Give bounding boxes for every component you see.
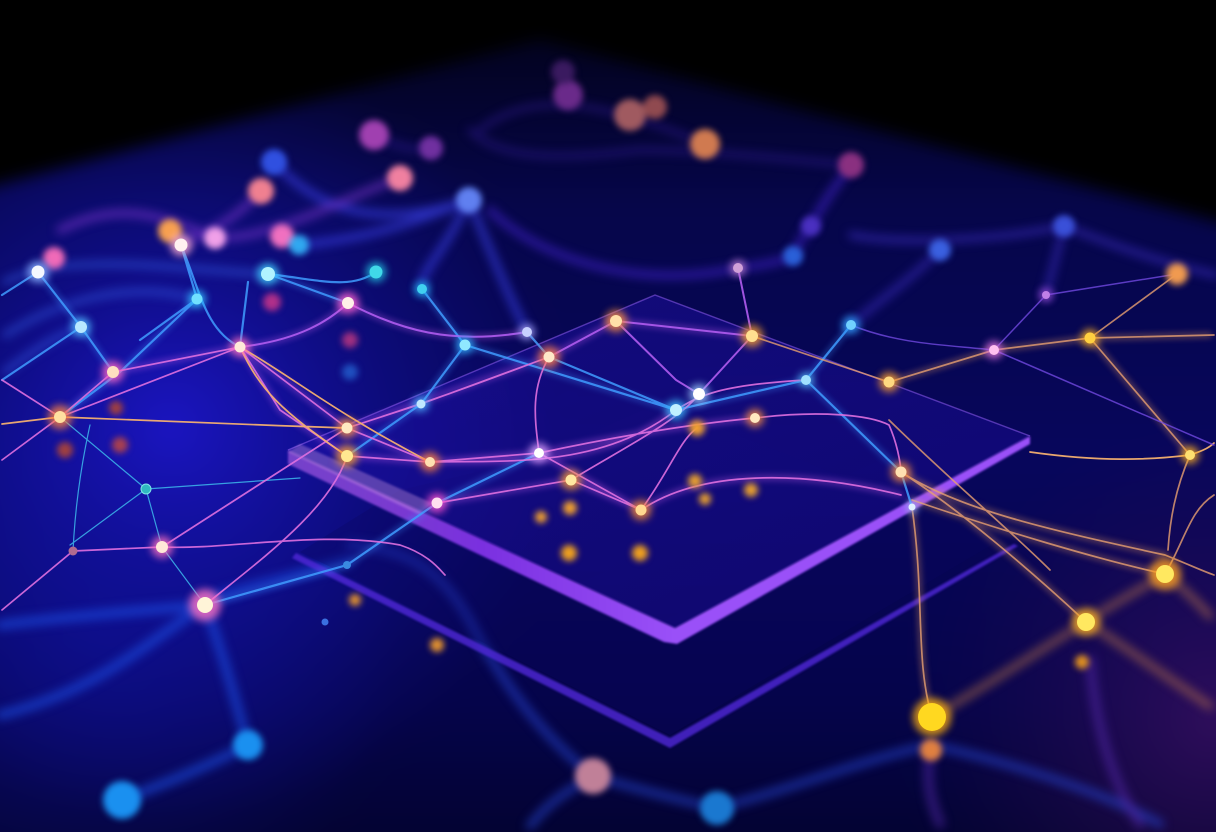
- glowing nodes: halo layer: [27, 234, 1199, 736]
- network line glow: [38, 272, 1210, 717]
- sharp network lines: orange: [2, 274, 1214, 717]
- sharp network lines: blue and cyan: [2, 245, 912, 605]
- lower glass plate reflection: [292, 507, 1018, 749]
- glass plate: [288, 295, 1030, 644]
- sharp network lines: pink and purple: [2, 347, 901, 610]
- glowing nodes: bright cores: [32, 238, 1195, 731]
